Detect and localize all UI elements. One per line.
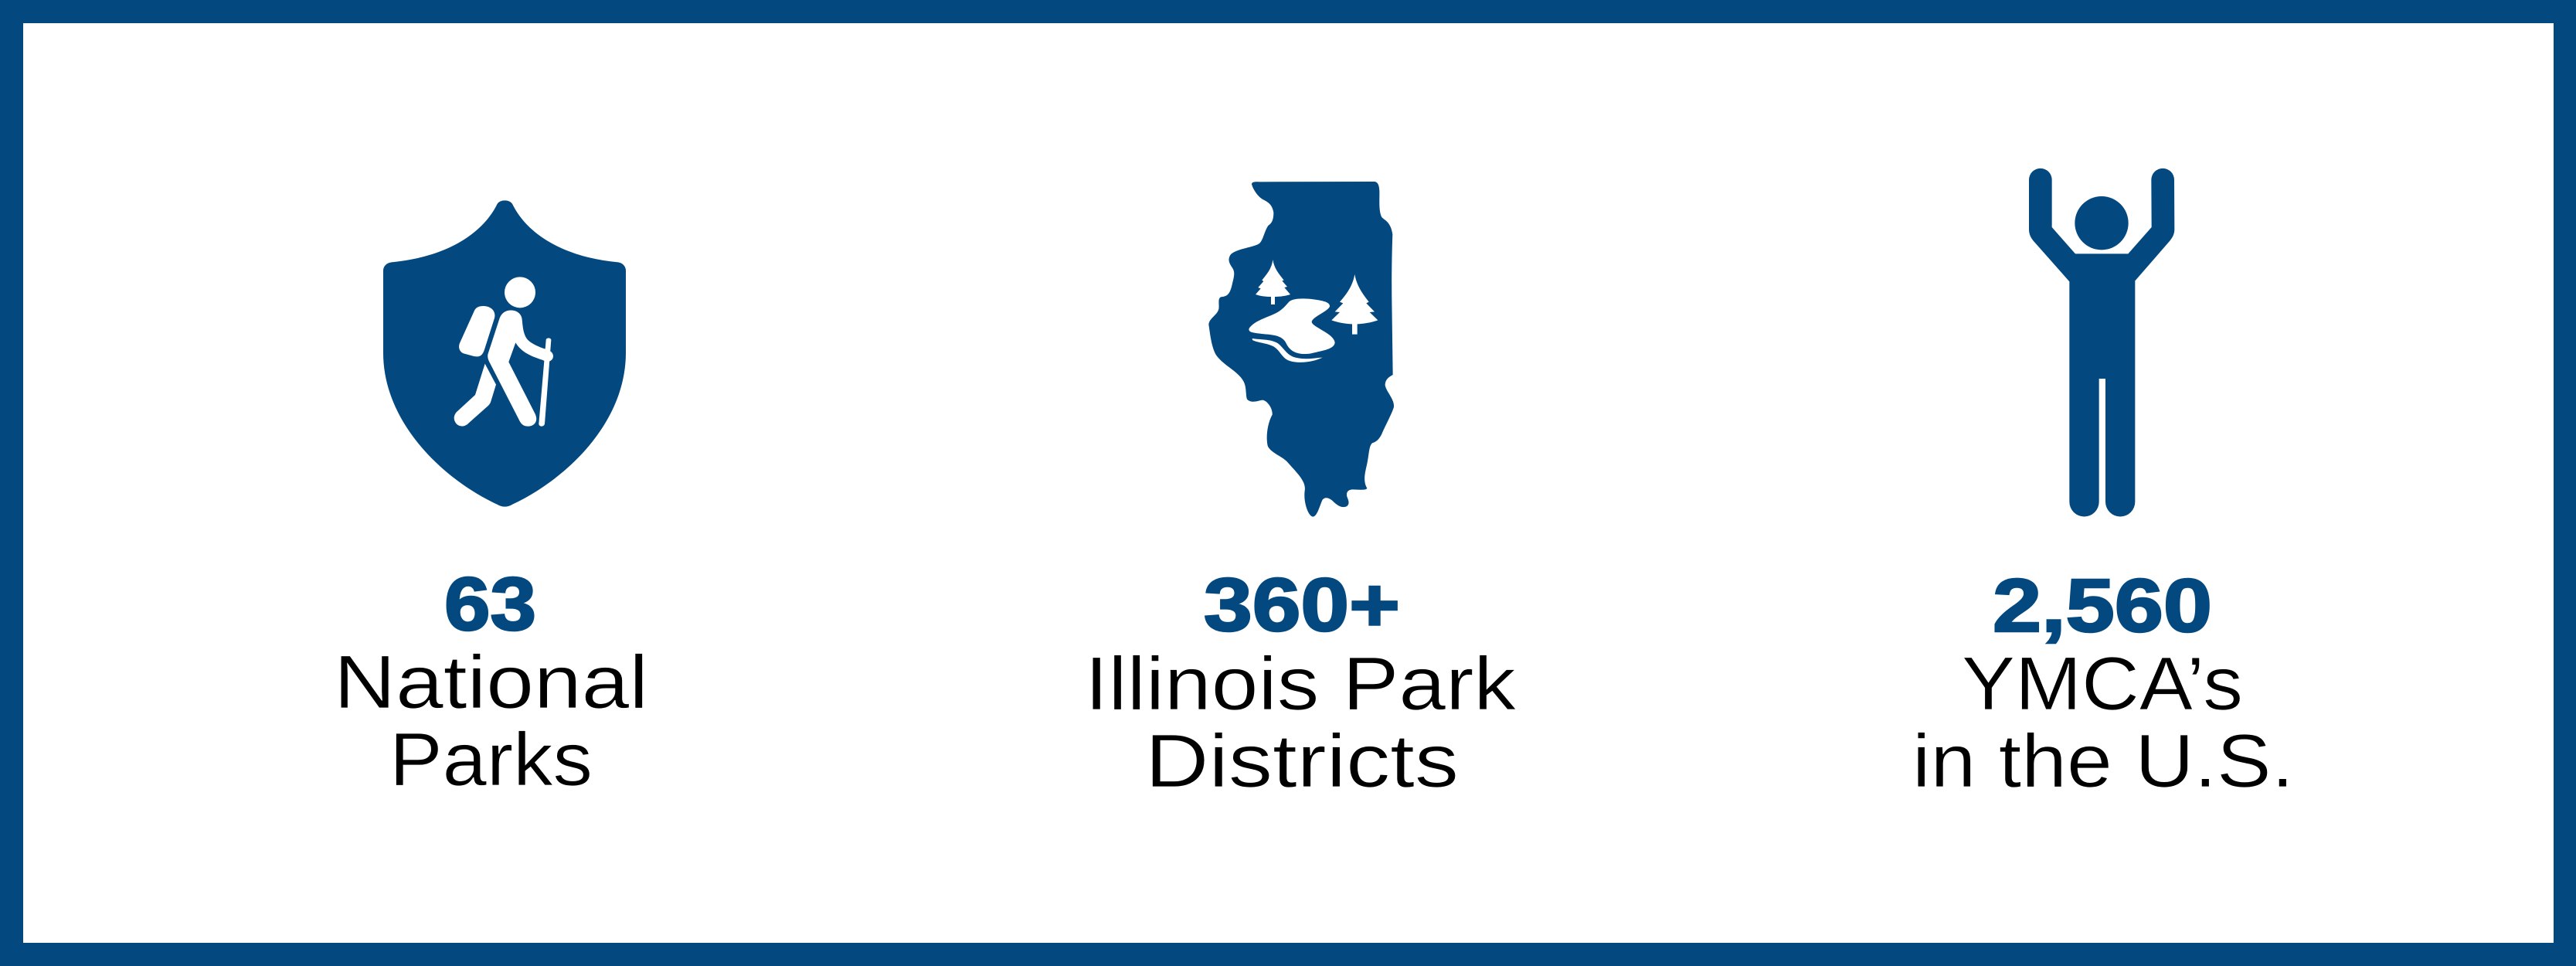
panel: YMCAs in the U.S. [1912,168,2294,803]
label: National Parks [334,640,648,801]
label: YMCA's in the U.S.: YMCA’s [1962,641,2243,726]
label: Illinois Park Districts [1085,641,1517,803]
label: YMCA's in the U.S.: in the U.S. [1912,719,2294,803]
label: National Parks: Parks [389,717,593,801]
label: Illinois Park Districts: Illinois Park [1085,641,1517,726]
label: YMCA's in the U.S. [1912,641,2294,803]
icon: person with raised arms [2029,168,2174,516]
label: National Parks: National [334,640,648,724]
icon: shield with hiker [383,200,626,507]
label: Illinois Park Districts: Districts [1145,719,1459,803]
stat: 2,560: 2,560 [1993,563,2212,648]
icon: Illinois map with trees and lake [1208,182,1394,517]
panel: national parks [334,200,648,801]
stat: 63: 63 [444,562,536,646]
panel: Illinois park districts [1085,182,1517,803]
stat: 360+: 360+ [1204,563,1400,647]
